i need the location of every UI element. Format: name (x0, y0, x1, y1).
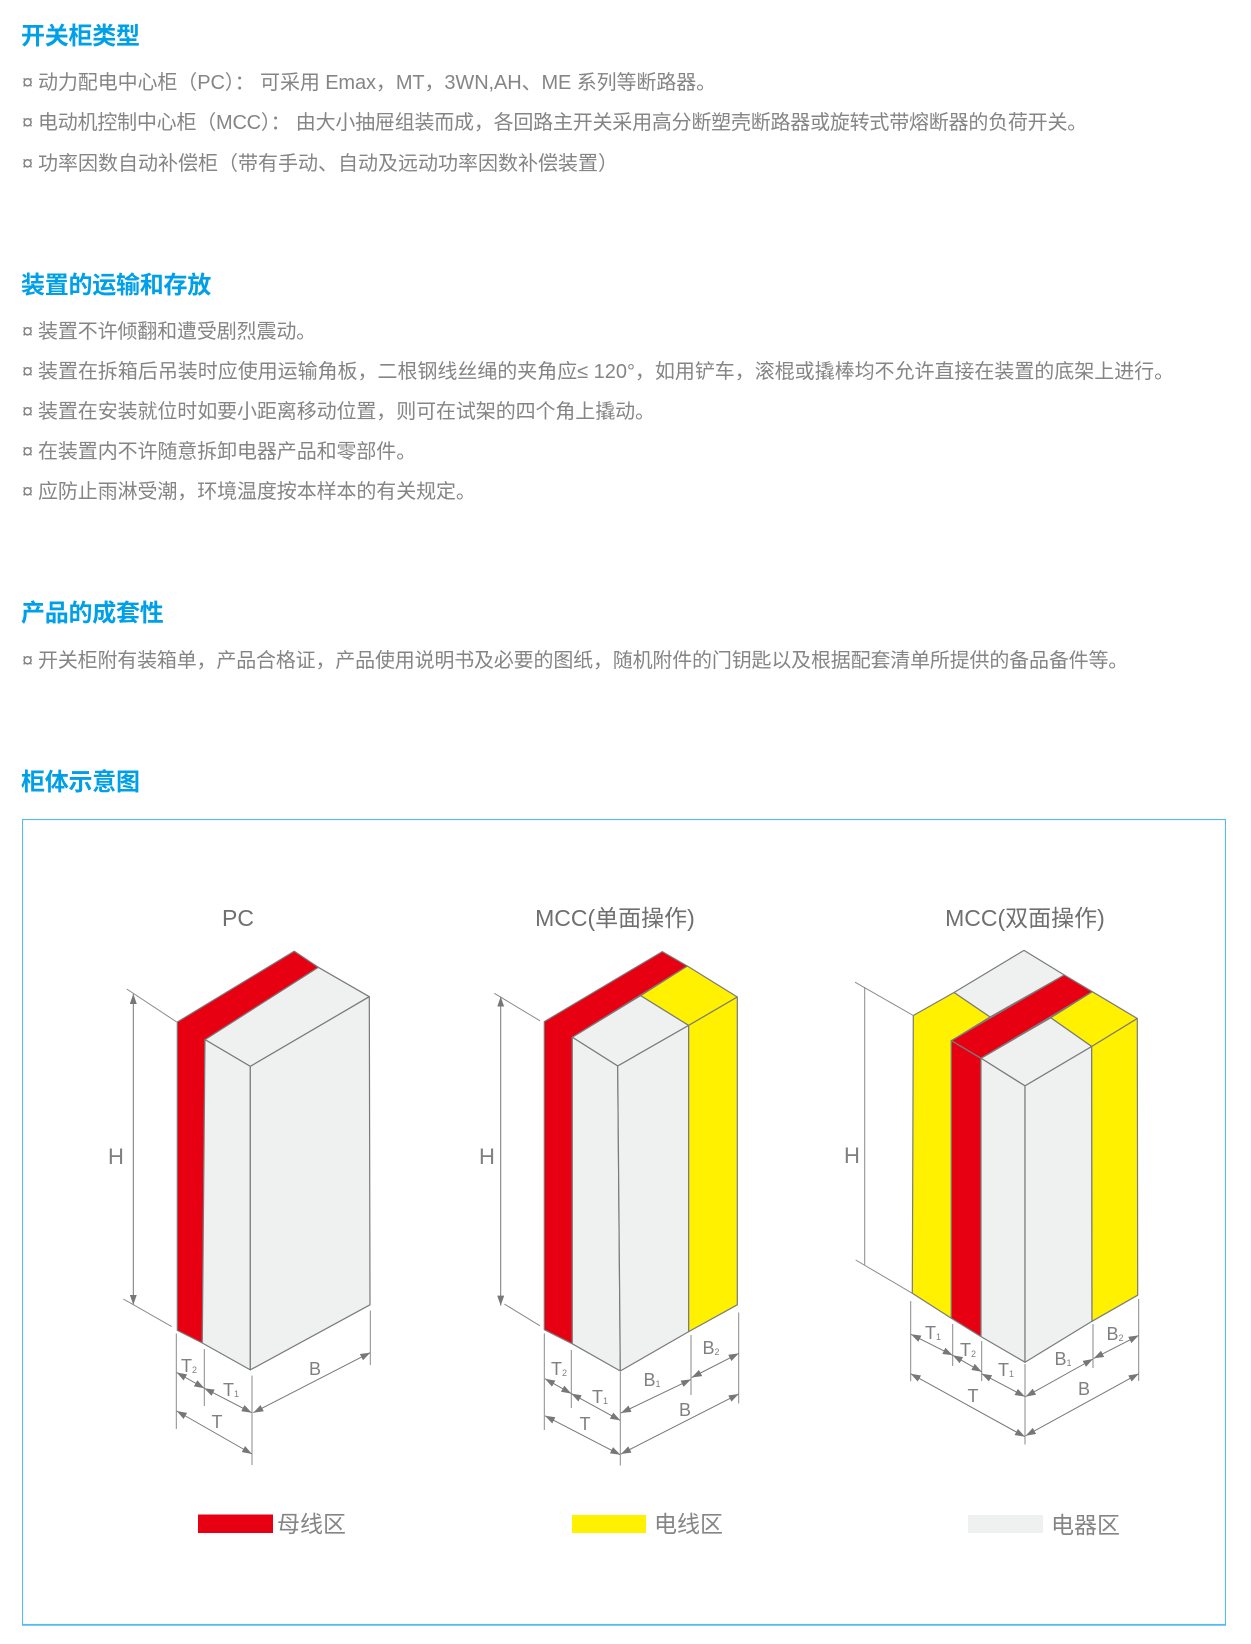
dimensions: B (1054, 1349, 1066, 1369)
dimensions (108, 989, 370, 1465)
text line: 动力配电中心柜（PC）： 可采用 Emax，MT，3WN,AH、ME 系列等断路器。 (38, 72, 716, 94)
heading: 产品的成套性 (21, 600, 164, 627)
heading: 开关柜类型 (21, 23, 140, 50)
text line: 应防止雨淋受潮，环境温度按本样本的有关规定。 (38, 481, 476, 503)
dimensions: B (643, 1370, 656, 1390)
dimensions: 2 (192, 1365, 197, 1375)
legend: busbar zone (198, 1511, 346, 1537)
dimensions: B (1106, 1324, 1118, 1344)
title: MCC(双面操作) (945, 905, 1105, 931)
text line: 装置在拆箱后吊装时应使用运输角板，二根钢线丝绳的夹角应≤ 120°，如用铲车，滚棍或撬棒均不允许直接在装置的底架上进行。 (38, 361, 1174, 383)
legend: wiring zone (572, 1511, 723, 1537)
cabinet: PC (108, 905, 370, 1465)
heading: cabinet diagrams: 柜体示意图 (21, 769, 140, 796)
dimensions: B (679, 1400, 691, 1420)
dimensions: 2 (562, 1368, 567, 1378)
dimensions: H (479, 1144, 495, 1169)
dimensions: T (551, 1359, 562, 1379)
panel: cabinet diagrams (22, 819, 1226, 1626)
dimensions (844, 982, 1139, 1444)
section: switchgear types (21, 23, 1087, 175)
dimensions: 1 (1066, 1358, 1072, 1368)
text line: ¤ (22, 72, 33, 94)
cabinet body (544, 952, 737, 1371)
dimensions: 1 (603, 1396, 608, 1406)
dimensions: T (181, 1356, 192, 1376)
text line: 功率因数自动补偿柜（带有手动、自动及远动功率因数补偿装置） (38, 153, 618, 175)
dimensions: B (702, 1338, 714, 1358)
text line: ¤ (22, 321, 33, 343)
dimensions: B (309, 1359, 321, 1379)
dimensions: 1 (234, 1389, 239, 1399)
section: product completeness (21, 600, 1128, 672)
dimensions: 1 (936, 1332, 941, 1342)
text line: 在装置内不许随意拆卸电器产品和零部件。 (38, 441, 416, 463)
dimensions: T (580, 1414, 590, 1434)
text line: 电动机控制中心柜（MCC）： 由大小抽屉组装而成，各回路主开关采用高分断塑壳断路器或旋转式带熔断器的负荷开关。 (38, 112, 1087, 134)
title: MCC(单面操作) (535, 905, 695, 931)
dimensions: H (108, 1144, 124, 1169)
dimensions: H (844, 1143, 860, 1168)
dimensions: 2 (971, 1349, 976, 1359)
text line: 装置不许倾翻和遭受剧烈震动。 (38, 321, 316, 343)
text line: ¤ (22, 650, 33, 672)
dimensions: T (592, 1387, 603, 1407)
text line: 开关柜附有装箱单，产品合格证，产品使用说明书及必要的图纸，随机附件的门钥匙以及根据配套清单所提供的备品备件等。 (38, 650, 1128, 672)
dimensions (479, 993, 739, 1466)
legend: busbar zone: 母线区 (277, 1511, 346, 1537)
dimensions: T (223, 1380, 234, 1400)
legend: electrical zone: 电器区 (1051, 1512, 1120, 1538)
text line: ¤ (22, 153, 33, 175)
dimensions: T (998, 1360, 1009, 1380)
dimensions: 2 (714, 1347, 720, 1357)
dimensions: T (968, 1386, 978, 1406)
text line: ¤ (22, 361, 33, 383)
dimensions: B (1078, 1379, 1090, 1399)
dimensions: 1 (656, 1379, 661, 1389)
text line: ¤ (22, 481, 33, 503)
cabinet body (177, 951, 370, 1370)
dimensions: 1 (1009, 1369, 1014, 1379)
dimensions: 2 (1118, 1333, 1124, 1343)
text line: 装置在安装就位时如要小距离移动位置，则可在试架的四个角上撬动。 (38, 401, 655, 423)
dimensions: T (925, 1323, 936, 1343)
cabinet body (912, 950, 1138, 1362)
heading: 装置的运输和存放 (21, 272, 211, 299)
text line: ¤ (22, 401, 33, 423)
cabinet: MCC double-sided (844, 905, 1139, 1444)
dimensions: T (212, 1412, 222, 1432)
text line: ¤ (22, 112, 33, 134)
legend: wiring zone: 电线区 (654, 1511, 723, 1537)
title: PC (222, 905, 254, 931)
legend: electrical zone (968, 1512, 1120, 1538)
text line: ¤ (22, 441, 33, 463)
dimensions: T (960, 1340, 971, 1360)
section: transport and storage (21, 272, 1174, 503)
cabinet: MCC single-sided (479, 905, 739, 1466)
